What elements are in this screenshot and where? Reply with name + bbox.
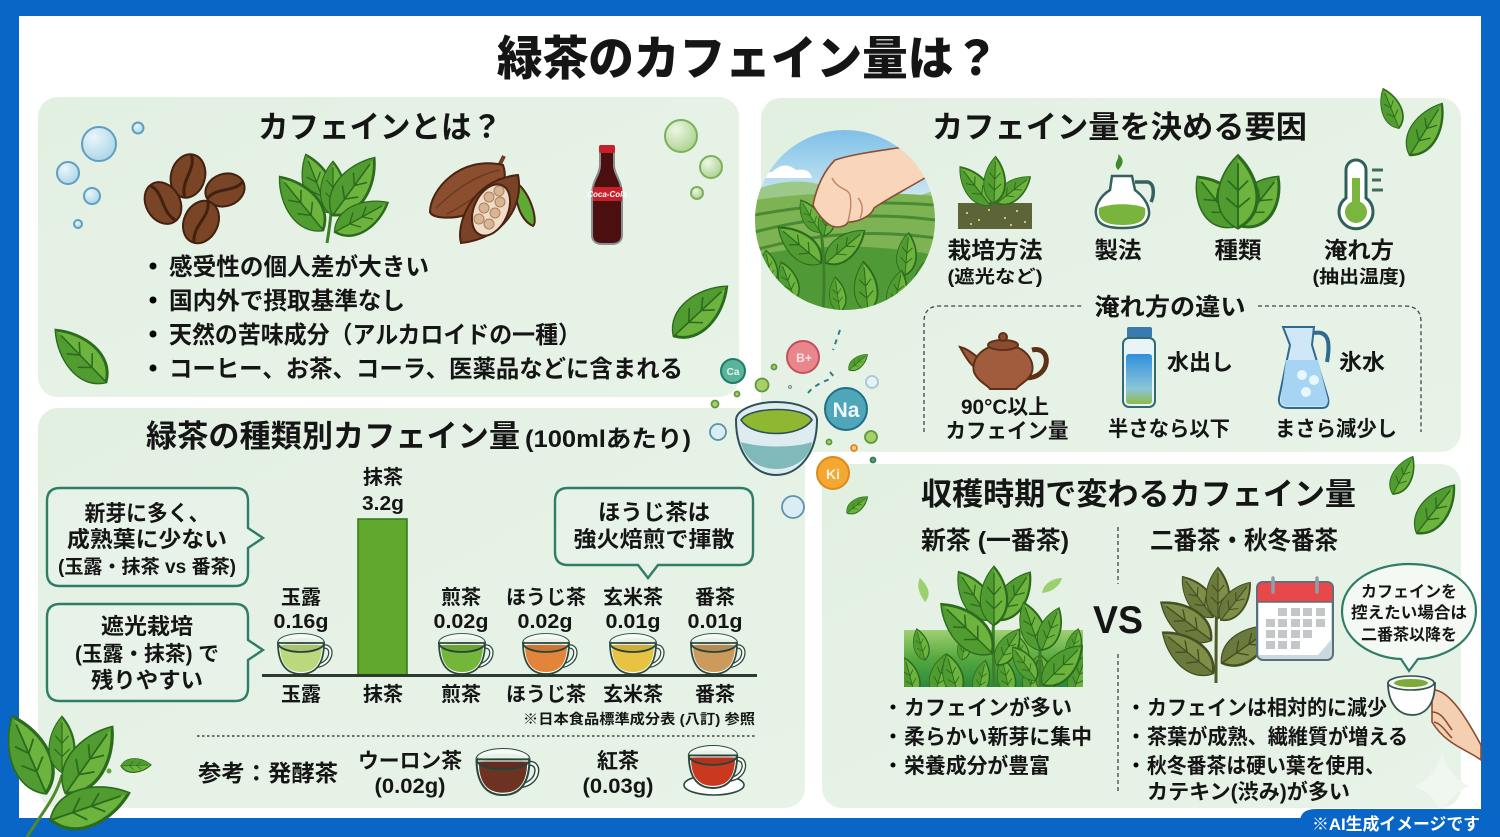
icon: cola bottle [587, 145, 627, 244]
source note: ※日本食品標準成分表 (八訂) 参照 [523, 711, 755, 727]
bar chart [262, 466, 757, 706]
icon: black tea cup [684, 746, 744, 795]
icon: cacao pod [430, 156, 535, 243]
panel: harvest time [822, 452, 1481, 822]
dotted divider [197, 735, 757, 737]
heading: tea types [146, 419, 691, 454]
heading: what is caffeine: カフェインとは？ [258, 110, 502, 145]
panel: caffeine per tea type [38, 408, 805, 808]
image: hand picking tea in field [755, 130, 943, 314]
heading: harvest: 収穫時期で変わるカフェイン量 [921, 477, 1356, 512]
column head: later flush: 二番茶・秋冬番茶 [1150, 527, 1338, 555]
mineral: B+ [787, 341, 819, 373]
callout: shading [47, 604, 263, 701]
callout: hojicha [555, 488, 753, 578]
value labels: 0.02g [518, 611, 572, 633]
mineral: Ca [721, 359, 745, 383]
bubbles: blue [57, 122, 144, 228]
bullets: first flush [890, 696, 1092, 778]
dashes [808, 330, 840, 393]
speech bubble [1342, 564, 1476, 671]
axis labels: ほうじ茶 [506, 683, 586, 706]
column head: first flush: 新茶 (一番茶) [921, 527, 1069, 555]
bullets: later flush: 秋冬番茶は硬い葉を使用、 [1147, 755, 1385, 778]
icon: oolong cup [477, 749, 537, 795]
icon: leaf varieties [1184, 156, 1292, 237]
text: ice water: まさら減少し [1275, 417, 1397, 441]
text: ice water: 氷水 [1339, 350, 1385, 375]
value labels: 番茶 [695, 586, 735, 609]
factor labels: 栽培方法 [948, 237, 1042, 263]
panel: what is caffeine [38, 97, 739, 397]
callout: hojicha: 強火焙煎で揮散 [574, 527, 734, 552]
bullet list [150, 253, 683, 383]
callout: hojicha: ほうじ茶は [598, 500, 710, 525]
image: young tea field [904, 565, 1083, 687]
leaves: top right [1374, 86, 1453, 162]
factor labels: (遮光など) [948, 267, 1042, 287]
bullets: later flush: カフェインは相対的に減少 [1147, 696, 1387, 720]
speech bubble: カフェインを [1361, 583, 1457, 601]
footer tab [1300, 809, 1500, 837]
bullet list: 天然の苦味成分（アルカロイドの一種） [169, 322, 581, 349]
factor labels: 種類 [1214, 237, 1262, 263]
mini leaves [843, 350, 871, 518]
axis [262, 674, 757, 677]
footer tab: ※AI生成イメージです [1312, 814, 1480, 834]
icon: calendar [1257, 578, 1333, 660]
callout: shading: 残りやすい [91, 668, 203, 693]
axis labels: 番茶 [695, 683, 735, 706]
value labels: 3.2g [362, 493, 404, 515]
value labels: 抹茶 [363, 466, 403, 489]
icon: cultivation plant [952, 157, 1036, 229]
icon: central tea cup with minerals [710, 330, 878, 518]
value labels: 0.16g [274, 611, 328, 633]
reference: fermented teas: (0.02g) [374, 775, 446, 798]
value labels: 玄米茶 [603, 586, 663, 609]
axis labels: 抹茶 [363, 683, 403, 706]
cups [278, 634, 743, 674]
factor labels: (抽出温度) [1312, 267, 1406, 287]
bullets: first flush: 栄養成分が豊富 [904, 754, 1050, 778]
factor labels [948, 237, 1406, 287]
bullet list: 国内外で摂取基準なし [169, 288, 405, 315]
icon: teapot [960, 333, 1046, 389]
leaf decoration: bottom left sprig [0, 709, 151, 837]
text: ice water [1275, 350, 1397, 441]
icon: process carafe [1096, 154, 1153, 228]
heading: tea types: (100mlあたり) [525, 426, 691, 453]
icon: hand holding cup [1388, 676, 1481, 760]
icon: tea leaves [268, 149, 394, 244]
value labels: 煎茶 [441, 586, 481, 609]
text: 90C: カフェイン量 [946, 420, 1068, 443]
VS: VS [1093, 599, 1143, 642]
reference: fermented teas: 参考：発酵茶 [198, 760, 338, 786]
bullets: later flush [1134, 696, 1408, 804]
bubbles: green [665, 120, 722, 199]
axis labels: 玉露 [281, 684, 321, 706]
leaf: left [44, 319, 118, 393]
small bubbles [710, 364, 878, 518]
bullets: later flush: 茶葉が成熟、繊維質が増える [1147, 725, 1408, 749]
leaf: right [663, 275, 738, 348]
icon: cold brew bottle [1123, 327, 1155, 407]
callout: shading: 遮光栽培 [101, 614, 193, 639]
icon: ice water jug [1279, 327, 1329, 408]
bullets: first flush: カフェインが多い [904, 696, 1072, 720]
axis labels [281, 683, 735, 706]
value labels [274, 466, 742, 633]
factor labels: 淹れ方 [1324, 237, 1394, 263]
leaf: small [121, 758, 151, 773]
icon: thermometer [1339, 160, 1383, 229]
value labels: 玉露 [281, 587, 321, 609]
dashed box: brewing differences [924, 306, 1421, 432]
text: cold brew [1108, 350, 1233, 441]
callout: new buds [47, 488, 263, 586]
axis labels: 玄米茶 [603, 683, 663, 706]
VS divider [1117, 527, 1119, 792]
value labels: 0.01g [688, 611, 742, 633]
bullet list: コーヒー、お茶、コーラ、医薬品などに含まれる [169, 356, 683, 383]
mineral: Ca: Ca [727, 367, 740, 378]
heading: factors: カフェイン量を決める要因 [932, 110, 1307, 145]
icon: coffee beans [137, 150, 249, 249]
bullets: later flush: カテキン(渋み)が多い [1147, 780, 1350, 804]
cup [736, 402, 817, 475]
mineral: B+: B+ [796, 351, 812, 365]
speech bubble: 控えたい場合は [1351, 604, 1467, 622]
bar: matcha [358, 519, 407, 675]
text: 90C: 90°C以上 [961, 396, 1049, 419]
text: cold brew: 水出し [1167, 350, 1233, 375]
sparkle [1414, 750, 1470, 822]
icon: mature tea leaves [1153, 568, 1282, 684]
text: cold brew: 半さなら以下 [1108, 418, 1230, 441]
speech bubble: 二番茶以降を [1361, 626, 1457, 644]
leaves: top right [1385, 452, 1465, 541]
mineral: Ki [817, 457, 849, 489]
icon: cola bottle: Coca-Cola [587, 190, 627, 199]
callout: new buds: 成熟葉に少ない [67, 527, 227, 552]
panel: factors [755, 86, 1461, 452]
value labels: 0.02g [434, 611, 488, 633]
axis labels: 煎茶 [441, 683, 481, 706]
reference: fermented teas [198, 746, 744, 798]
title: 緑茶のカフェイン量は？ [497, 32, 999, 85]
heading: brewing differences: 淹れ方の違い [1094, 294, 1246, 321]
reference: fermented teas: ウーロン茶 [358, 750, 462, 773]
callout: new buds: 新芽に多く、 [84, 501, 210, 526]
bullet list: 感受性の個人差が大きい [169, 253, 429, 281]
value labels: 0.01g [606, 611, 660, 633]
text: 90C [946, 396, 1068, 443]
bullets: first flush: 柔らかい新芽に集中 [904, 726, 1092, 749]
callout: shading: (玉露・抹茶) で [75, 643, 219, 666]
mineral: Na [825, 388, 867, 430]
reference: fermented teas: 紅茶 [597, 750, 639, 773]
value labels: ほうじ茶 [506, 586, 586, 609]
reference: fermented teas: (0.03g) [582, 775, 654, 798]
heading: tea types: 緑茶の種類別カフェイン量 [146, 419, 520, 454]
mineral: Na: Na [833, 399, 860, 422]
callout: new buds: (玉露・抹茶 vs 番茶) [58, 556, 236, 578]
mineral: Ki: Ki [826, 466, 840, 482]
factor labels: 製法 [1094, 237, 1142, 263]
